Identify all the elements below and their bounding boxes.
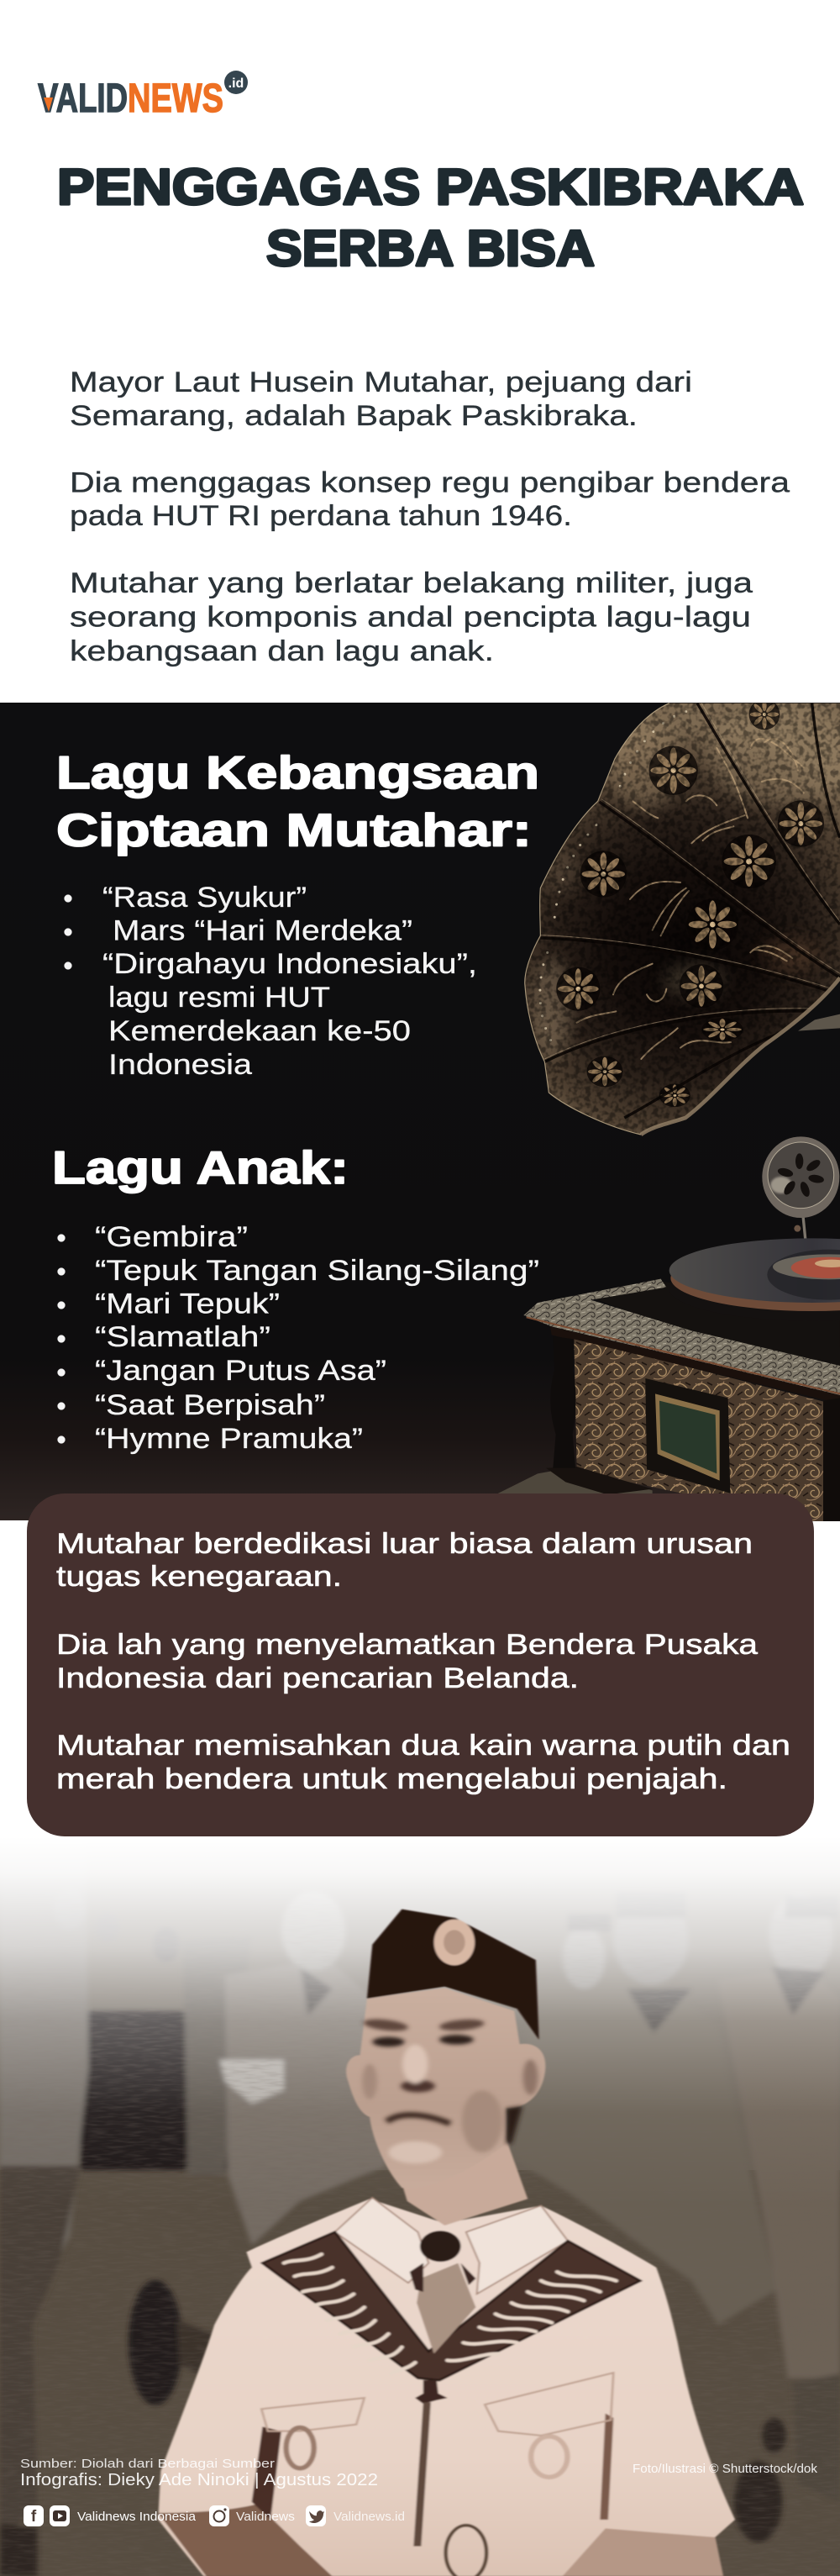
callout text — [56, 1528, 790, 1795]
cap — [367, 1910, 539, 2040]
list: children's songs: “Hymne Pramuka” — [95, 1423, 363, 1455]
panel: dark gramophone section — [0, 698, 840, 1521]
list: national songs: “Rasa Syukur” — [102, 882, 307, 914]
icon: facebook — [24, 2505, 44, 2526]
photo credit: Foto/Ilustrasi © Shutterstock/dok — [633, 2462, 817, 2476]
panel: brown callout box — [27, 1493, 814, 1836]
tie and woggle — [410, 2231, 475, 2546]
logo: Validnews.id: .id — [228, 76, 244, 91]
logo: Validnews.id: VALID — [38, 76, 128, 121]
cabinet top — [591, 1282, 840, 1367]
callout text: Dia lah yang menyelamatkan Bendera Pusaka — [56, 1629, 758, 1661]
list: children's songs: “Gembira” — [95, 1221, 248, 1253]
neck — [402, 2139, 528, 2226]
scarf — [263, 2232, 640, 2380]
icon: youtube — [50, 2505, 70, 2526]
callout text: Mutahar memisahkan dua kain warna putih dan — [56, 1730, 790, 1762]
list: children's songs: “Mari Tepuk” — [95, 1288, 280, 1320]
heading: national songs: Lagu Kebangsaan — [56, 746, 539, 798]
list: national songs — [64, 882, 477, 1081]
list: national songs: lagu resmi HUT — [108, 982, 330, 1014]
footer credits — [20, 2457, 817, 2526]
gramophone player illustration — [496, 1136, 840, 1521]
infographic credit: Infografis: Dieky Ade Ninoki | Agustus 2022 — [20, 2471, 378, 2489]
pockets and badges — [261, 2373, 613, 2576]
intro text: Dia menggagas konsep regu pengibar bendera — [70, 467, 790, 499]
intro text: Semarang, adalah Bapak Paskibraka. — [70, 400, 638, 432]
heading: national songs — [56, 746, 539, 856]
heading: national songs: Ciptaan Mutahar: — [56, 803, 532, 856]
facial features — [362, 2017, 538, 2163]
intro text: Mayor Laut Husein Mutahar, pejuang dari — [70, 366, 692, 398]
list: children's songs: “Saat Berpisah” — [95, 1389, 325, 1421]
panel: photo background with scouts crowd — [0, 1836, 840, 2576]
cabinet side with embossed panel — [574, 1339, 826, 1521]
social label: Validnews: Validnews — [236, 2510, 295, 2524]
column — [550, 1336, 575, 1468]
icon: twitter — [306, 2505, 326, 2526]
intro text — [70, 366, 790, 667]
sound box disc — [762, 1136, 839, 1244]
shirt — [158, 2199, 735, 2576]
intro text: kebangsaan dan lagu anak. — [70, 635, 494, 667]
logo: Validnews.id: NEWS — [128, 76, 223, 121]
social label: Validnews Indonesia: Validnews Indonesia — [77, 2510, 197, 2524]
heading: children's songs: Lagu Anak: — [52, 1141, 349, 1193]
list: children's songs: “Jangan Putus Asa” — [95, 1355, 386, 1387]
collar — [335, 2198, 568, 2294]
callout text: Indonesia dari pencarian Belanda. — [56, 1662, 579, 1694]
list: children's songs: “Slamatlah” — [95, 1321, 270, 1353]
callout text: Mutahar berdedikasi luar biasa dalam urusan — [56, 1528, 753, 1560]
green window — [645, 1378, 730, 1493]
white fade over crowd — [0, 1836, 840, 2150]
icon: instagram — [209, 2505, 229, 2526]
background figures — [0, 1913, 840, 2576]
face — [346, 1988, 545, 2189]
list: national songs: Kemerdekaan ke-50 — [108, 1015, 411, 1047]
panel: songs list text — [52, 746, 539, 1455]
portrait of Husein Mutahar — [158, 1910, 735, 2576]
source text: Sumber: Diolah dari Berbagai Sumber — [20, 2457, 275, 2471]
intro text: Mutahar yang berlatar belakang militer, juga — [70, 567, 753, 599]
title — [57, 159, 804, 277]
callout text: tugas kenegaraan. — [56, 1561, 342, 1593]
list: national songs: Indonesia — [108, 1049, 252, 1081]
turntable record — [669, 1238, 840, 1321]
title: SERBA BISA — [266, 220, 595, 277]
gramophone horn illustration — [512, 698, 840, 1146]
list: national songs: “Dirgahayu Indonesiaku”, — [102, 948, 477, 980]
intro text: pada HUT RI perdana tahun 1946. — [70, 500, 572, 532]
callout text: merah bendera untuk mengelabui penjajah. — [56, 1763, 727, 1795]
list: national songs: Mars “Hari Merdeka” — [113, 914, 412, 946]
logo: Validnews.id — [38, 71, 248, 121]
title: PENGGAGAS PASKIBRAKA — [57, 159, 804, 215]
intro text: seorang komponis andal pencipta lagu-lagu — [70, 602, 751, 634]
list: children's songs: “Tepuk Tangan Silang-Silang” — [95, 1255, 539, 1287]
icon: facebook: f — [31, 2508, 37, 2526]
social label: Validnews.id: Validnews.id — [333, 2510, 405, 2524]
list: children's songs — [57, 1221, 539, 1455]
